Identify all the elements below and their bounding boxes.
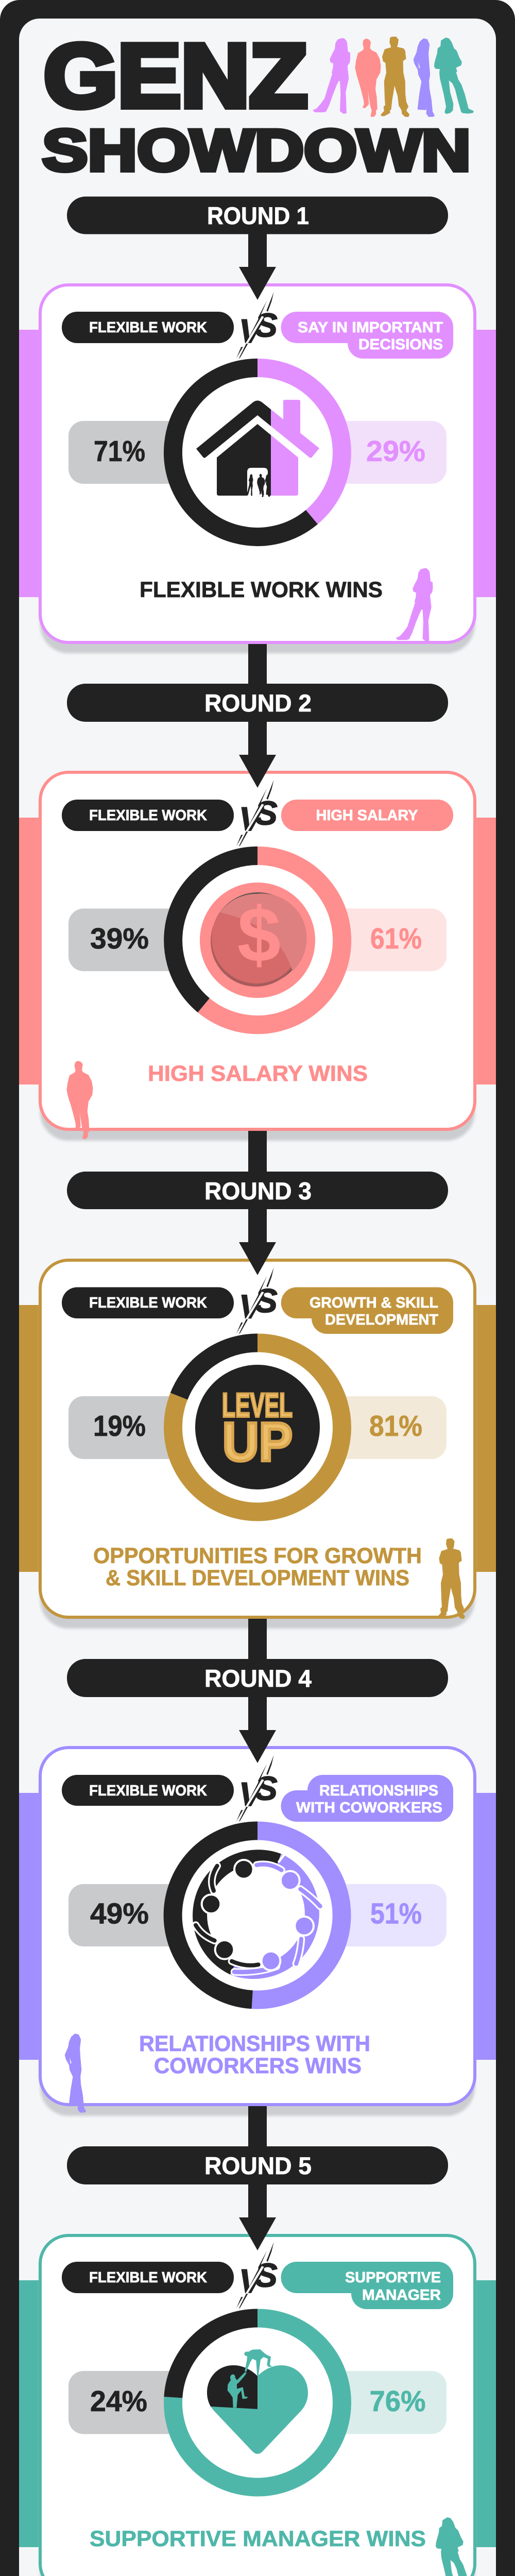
result text: COWORKERS WINS	[154, 2054, 362, 2078]
title line: GENZ: GENZ	[44, 25, 307, 126]
silhouette	[65, 2033, 86, 2112]
right contender label: RELATIONSHIPS	[319, 1783, 438, 1799]
right contender pill	[281, 2262, 453, 2309]
card	[40, 1260, 475, 1617]
VS badge	[236, 1755, 278, 1822]
arrow	[239, 644, 276, 788]
panel: round 2	[19, 644, 496, 1141]
title line: SHOWDOWN: SHOWDOWN	[42, 118, 471, 183]
colour band	[19, 1793, 496, 2060]
card	[40, 772, 475, 1129]
result text	[139, 2031, 370, 2078]
VS badge: S	[255, 1769, 278, 1807]
VS badge: V	[239, 800, 264, 838]
donut chart	[164, 2309, 351, 2497]
left contender pill	[62, 312, 234, 343]
card shadow	[40, 1757, 475, 2116]
card shadow	[40, 1270, 475, 1629]
result text: SUPPORTIVE MANAGER WINS	[90, 2527, 426, 2551]
left percent: 49%	[90, 1897, 149, 1930]
result text: FLEXIBLE WORK WINS	[140, 578, 383, 602]
round pill	[67, 684, 448, 722]
right contender label: GROWTH & SKILL	[310, 1295, 438, 1311]
percent pill left	[68, 2371, 192, 2434]
arrow	[239, 1619, 276, 1763]
VS badge: V	[239, 2262, 264, 2300]
round pill	[67, 1172, 448, 1209]
right contender pill	[281, 1775, 453, 1822]
card shadow	[40, 295, 475, 653]
arrow	[239, 1131, 276, 1275]
percent pill right	[323, 1884, 447, 1946]
percent pill right	[323, 1396, 447, 1459]
icon: coin: $	[237, 891, 281, 978]
right contender label: HIGH SALARY	[316, 807, 418, 824]
VS badge: V	[239, 1287, 264, 1325]
left percent: 19%	[93, 1410, 146, 1443]
title	[42, 25, 471, 183]
round label: ROUND 3	[204, 1177, 312, 1205]
right contender label: SUPPORTIVE	[345, 2269, 441, 2286]
left contender pill	[62, 1287, 234, 1318]
icon: level up: UP	[222, 1412, 293, 1472]
percent pill left	[68, 1396, 192, 1459]
right contender label: SAY IN IMPORTANT	[298, 319, 443, 336]
VS badge: S	[255, 2256, 278, 2294]
right percent: 76%	[370, 2385, 425, 2418]
VS badge	[236, 780, 278, 847]
silhouette	[66, 1061, 93, 1139]
left contender pill	[62, 1775, 234, 1806]
percent pill right	[323, 421, 447, 484]
donut chart	[164, 359, 351, 546]
right contender pill	[281, 312, 453, 359]
right contender label line 2: DEVELOPMENT	[325, 1312, 438, 1328]
VS badge: S	[255, 306, 278, 344]
round pill	[67, 1659, 448, 1697]
round label: ROUND 2	[204, 689, 312, 717]
VS badge: V	[239, 1775, 264, 1813]
round label: ROUND 4	[204, 1665, 312, 1692]
percent pill left	[68, 421, 192, 484]
right contender label line 2: MANAGER	[362, 2287, 441, 2303]
silhouette	[436, 2517, 475, 2576]
VS badge	[236, 1267, 278, 1334]
card	[40, 2235, 475, 2576]
left percent: 24%	[90, 2385, 147, 2418]
colour band	[19, 330, 496, 597]
right contender label line 2: DECISIONS	[358, 336, 443, 353]
round label: ROUND 1	[207, 202, 309, 229]
icon: level up: LEVEL	[222, 1386, 293, 1424]
right percent: 51%	[370, 1897, 422, 1930]
right contender label line 2: WITH COWORKERS	[296, 1800, 442, 1816]
left contender label: FLEXIBLE WORK	[89, 807, 207, 824]
left contender label: FLEXIBLE WORK	[89, 1295, 207, 1311]
right percent: 29%	[366, 435, 425, 468]
result text: HIGH SALARY WINS	[148, 1061, 368, 1086]
icon: house	[196, 400, 319, 497]
card shadow	[40, 2245, 475, 2576]
round pill	[67, 2146, 448, 2184]
right contender pill	[281, 1287, 453, 1334]
card	[40, 285, 475, 642]
arrow	[239, 2106, 276, 2250]
percent pill left	[68, 909, 192, 971]
VS badge	[236, 292, 278, 359]
round label: ROUND 5	[204, 2152, 312, 2179]
right contender pill	[281, 800, 453, 831]
left percent: 71%	[94, 435, 145, 468]
silhouette	[396, 568, 433, 641]
percent pill left	[68, 1884, 192, 1946]
donut chart	[164, 1333, 351, 1521]
colour band	[19, 1305, 496, 1572]
colour band	[19, 2280, 496, 2547]
VS badge: S	[255, 1282, 278, 1319]
left contender label: FLEXIBLE WORK	[89, 319, 207, 336]
icon: coin	[200, 883, 315, 998]
panel: round 5	[19, 2106, 496, 2576]
panel: round 1	[19, 197, 496, 653]
donut chart	[164, 1822, 351, 2009]
icon: heart with climbers	[207, 2349, 308, 2454]
result text: & SKILL DEVELOPMENT WINS	[106, 1566, 409, 1590]
percent pill right	[323, 2371, 447, 2434]
left contender label: FLEXIBLE WORK	[89, 1783, 207, 1799]
percent pill right	[323, 909, 447, 971]
right percent: 61%	[370, 922, 422, 955]
right percent: 81%	[369, 1410, 422, 1443]
title silhouettes group	[313, 37, 474, 117]
panel: round 4	[19, 1619, 496, 2116]
left contender pill	[62, 800, 234, 831]
VS badge: S	[255, 794, 278, 832]
donut chart	[164, 846, 351, 1034]
icon: circle of people	[196, 1855, 320, 1972]
round pill	[67, 197, 448, 234]
VS badge	[236, 2242, 278, 2309]
VS badge: V	[239, 312, 264, 350]
result text: RELATIONSHIPS WITH	[139, 2031, 370, 2056]
left percent: 39%	[90, 922, 149, 955]
result text	[93, 1544, 422, 1590]
icon: level up	[195, 1365, 320, 1489]
left contender pill	[62, 2262, 234, 2293]
panel: round 3	[19, 1131, 496, 1629]
card shadow	[40, 782, 475, 1141]
silhouette	[438, 1538, 465, 1619]
colour band	[19, 818, 496, 1084]
left contender label: FLEXIBLE WORK	[89, 2269, 207, 2286]
card	[40, 1748, 475, 2105]
arrow	[239, 234, 276, 300]
result text: OPPORTUNITIES FOR GROWTH	[93, 1544, 422, 1568]
